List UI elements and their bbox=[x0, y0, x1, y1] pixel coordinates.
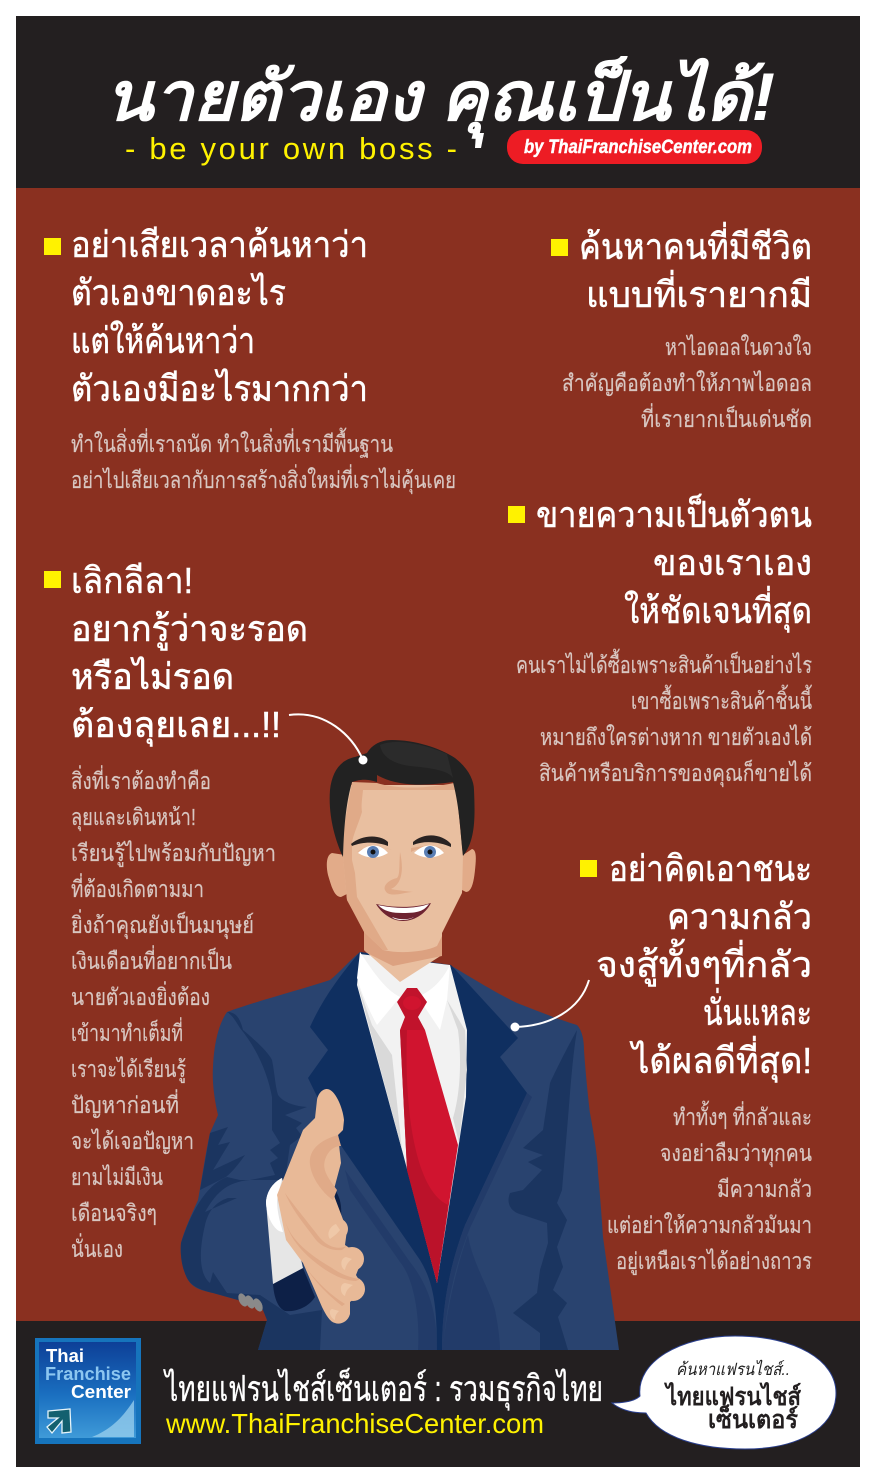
text block: tip 3: หาไอดอลในดวงใจ bbox=[665, 334, 812, 360]
face shading bbox=[343, 782, 455, 950]
footer heading: ไทยแฟรนไชส์เซ็นเตอร์ : รวมธุรกิจไทย bbox=[163, 1366, 603, 1411]
text block: tip 2: จะได้เจอปัญหา bbox=[71, 1128, 194, 1154]
text block: tip 3 bbox=[551, 222, 812, 432]
text block: tip 5: จงสู้ทั้งๆที่กลัว bbox=[596, 938, 812, 987]
text block: tip 2: ต้องลุยเลย...!! bbox=[71, 704, 281, 747]
panel: header bbox=[16, 16, 860, 188]
callout arrow: suit bbox=[510, 980, 589, 1032]
text block: tip 3: ค้นหาคนที่มีชีวิต bbox=[579, 222, 812, 267]
lapel edge bbox=[442, 1093, 532, 1350]
shirt cuff bbox=[266, 1178, 303, 1284]
text block: tip 5: อย่าคิดเอาชนะ bbox=[609, 848, 812, 889]
neck shadow bbox=[364, 932, 442, 966]
illustration: businessman bbox=[181, 740, 619, 1350]
text block: tip 2: เดือนจริงๆ bbox=[71, 1200, 157, 1226]
ears bbox=[327, 853, 349, 897]
collar bbox=[357, 952, 450, 1030]
text block: tip 5: ได้ผลดีที่สุด! bbox=[629, 1036, 812, 1083]
text block: tip 1: ตัวเองขาดอะไร bbox=[71, 272, 286, 313]
logo: Thai Franchise Center: Center bbox=[71, 1382, 131, 1402]
text block: tip 5: นั่นแหละ bbox=[703, 988, 812, 1033]
text block: tip 3: แบบที่เรายากมี bbox=[586, 270, 812, 315]
text block: tip 3: สำคัญคือต้องทำให้ภาพไอดอล bbox=[562, 370, 812, 396]
text block: tip 2: ที่ต้องเกิดตามมา bbox=[71, 873, 204, 902]
text block: tip 5: จงอย่าลืมว่าทุกคน bbox=[660, 1140, 812, 1167]
text block: tip 4 bbox=[508, 492, 812, 787]
hand bbox=[277, 1089, 365, 1324]
right side shadows bbox=[509, 1030, 577, 1350]
text block: tip 2: เลิกลีลา! bbox=[71, 560, 193, 601]
text block: tip 5: มีความกลัว bbox=[717, 1176, 812, 1202]
cuff buttons bbox=[236, 1292, 265, 1313]
hand creases bbox=[285, 1135, 360, 1306]
text block: tip 2: อยากรู้ว่าจะรอด bbox=[71, 608, 308, 651]
text block: tip 2: เรียนรู้ไปพร้อมกับปัญหา bbox=[71, 840, 276, 867]
text block: tip 2 bbox=[44, 560, 308, 1262]
text block: tip 2: สิ่งที่เราต้องทำคือ bbox=[71, 765, 211, 794]
title: นายตัวเอง คุณเป็นได้! bbox=[105, 56, 775, 139]
text block: tip 2: หรือไม่รอด bbox=[71, 656, 234, 697]
title descender mark bbox=[475, 133, 484, 148]
text block: tip 5: ความกลัว bbox=[667, 896, 812, 937]
text block: tip 4: ของเราเอง bbox=[653, 542, 812, 583]
text block: tip 5 bbox=[580, 848, 812, 1275]
jacket bbox=[181, 952, 619, 1350]
speech bubble: ค้นหาแฟรนไชส์.. bbox=[676, 1359, 790, 1379]
text block: tip 4: ให้ชัดเจนที่สุด bbox=[624, 586, 812, 633]
tie bbox=[397, 988, 458, 1283]
text block: tip 1: อย่าเสียเวลาค้นหาว่า bbox=[71, 224, 368, 265]
callout arrow: head bbox=[289, 714, 368, 764]
badge: by ThaiFranchiseCenter.com bbox=[507, 130, 762, 164]
panel: footer bbox=[16, 1321, 860, 1467]
text block: tip 1 bbox=[44, 224, 456, 494]
text block: tip 2: ลุยและเดินหน้า! bbox=[71, 804, 196, 831]
badge: by ThaiFranchiseCenter.com: by ThaiFranchiseCenter.com bbox=[524, 137, 752, 158]
text block: tip 2: ปัญหาก่อนที่ bbox=[71, 1089, 179, 1118]
logo: Thai Franchise Center bbox=[35, 1338, 141, 1444]
speech bubble: เซ็นเตอร์ bbox=[708, 1404, 799, 1434]
text block: tip 5: ทำทั้งๆ ที่กลัวและ bbox=[673, 1101, 812, 1130]
text block: tip 1: ทำในสิ่งที่เราถนัด ทำในสิ่งที่เรามีพื้นฐาน bbox=[71, 428, 393, 458]
text block: tip 2: เราจะได้เรียนรู้ bbox=[71, 1056, 186, 1083]
text block: tip 4: สินค้าหรือบริการของคุณก็ขายได้ bbox=[539, 758, 812, 787]
text block: tip 2: เข้ามาทำเต็มที่ bbox=[71, 1017, 183, 1046]
speech bubble bbox=[612, 1336, 836, 1449]
text block: tip 1: แต่ให้ค้นหาว่า bbox=[71, 320, 255, 361]
hair highlight bbox=[380, 742, 453, 778]
text block: tip 1: ตัวเองมีอะไรมากกว่า bbox=[71, 368, 368, 409]
hair bbox=[330, 740, 475, 857]
text block: tip 2: เงินเดือนที่อยากเป็น bbox=[71, 945, 232, 974]
text block: tip 1: อย่าไปเสียเวลากับการสร้างสิ่งใหม่ที่เราไม่คุ้นเคย bbox=[71, 464, 456, 494]
text block: tip 2: ยิ่งถ้าคุณยังเป็นมนุษย์ bbox=[71, 909, 254, 939]
text block: tip 2: ยามไม่มีเงิน bbox=[71, 1164, 163, 1190]
text block: tip 3: ที่เรายากเป็นเด่นชัด bbox=[641, 403, 812, 432]
sleeve opening bbox=[273, 1190, 341, 1311]
face and neck bbox=[343, 785, 463, 982]
eyebrows bbox=[351, 836, 388, 846]
nose bbox=[357, 845, 450, 895]
mouth bbox=[376, 903, 431, 921]
speech bubble: ไทยแฟรนไชส์ bbox=[663, 1381, 802, 1411]
inner jacket / lapels bbox=[308, 952, 527, 1350]
text block: tip 4: เขาซื้อเพราะสินค้าชิ้นนี้ bbox=[631, 685, 812, 714]
text block: tip 2: นั่นเอง bbox=[71, 1233, 123, 1262]
logo: Thai Franchise Center: Franchise bbox=[45, 1364, 131, 1384]
text block: tip 4: หมายถึงใครต่างหาก ขายตัวเองได้ bbox=[540, 724, 812, 750]
shirt bbox=[357, 954, 467, 1283]
text block: tip 5: แต่อย่าให้ความกลัวมันมา bbox=[607, 1212, 812, 1238]
text block: tip 5: อยู่เหนือเราได้อย่างถาวร bbox=[616, 1248, 812, 1275]
text block: tip 2: นายตัวเองยิ่งต้อง bbox=[71, 981, 210, 1010]
sleeve shadows bbox=[181, 1012, 322, 1350]
eyes bbox=[358, 846, 444, 858]
logo: Thai Franchise Center: Thai bbox=[46, 1346, 84, 1366]
footer url: www.ThaiFranchiseCenter.com bbox=[165, 1408, 544, 1439]
subtitle: - be your own boss - bbox=[125, 131, 457, 166]
panel: background bbox=[16, 188, 860, 1321]
text block: tip 4: ขายความเป็นตัวตน bbox=[536, 492, 812, 535]
